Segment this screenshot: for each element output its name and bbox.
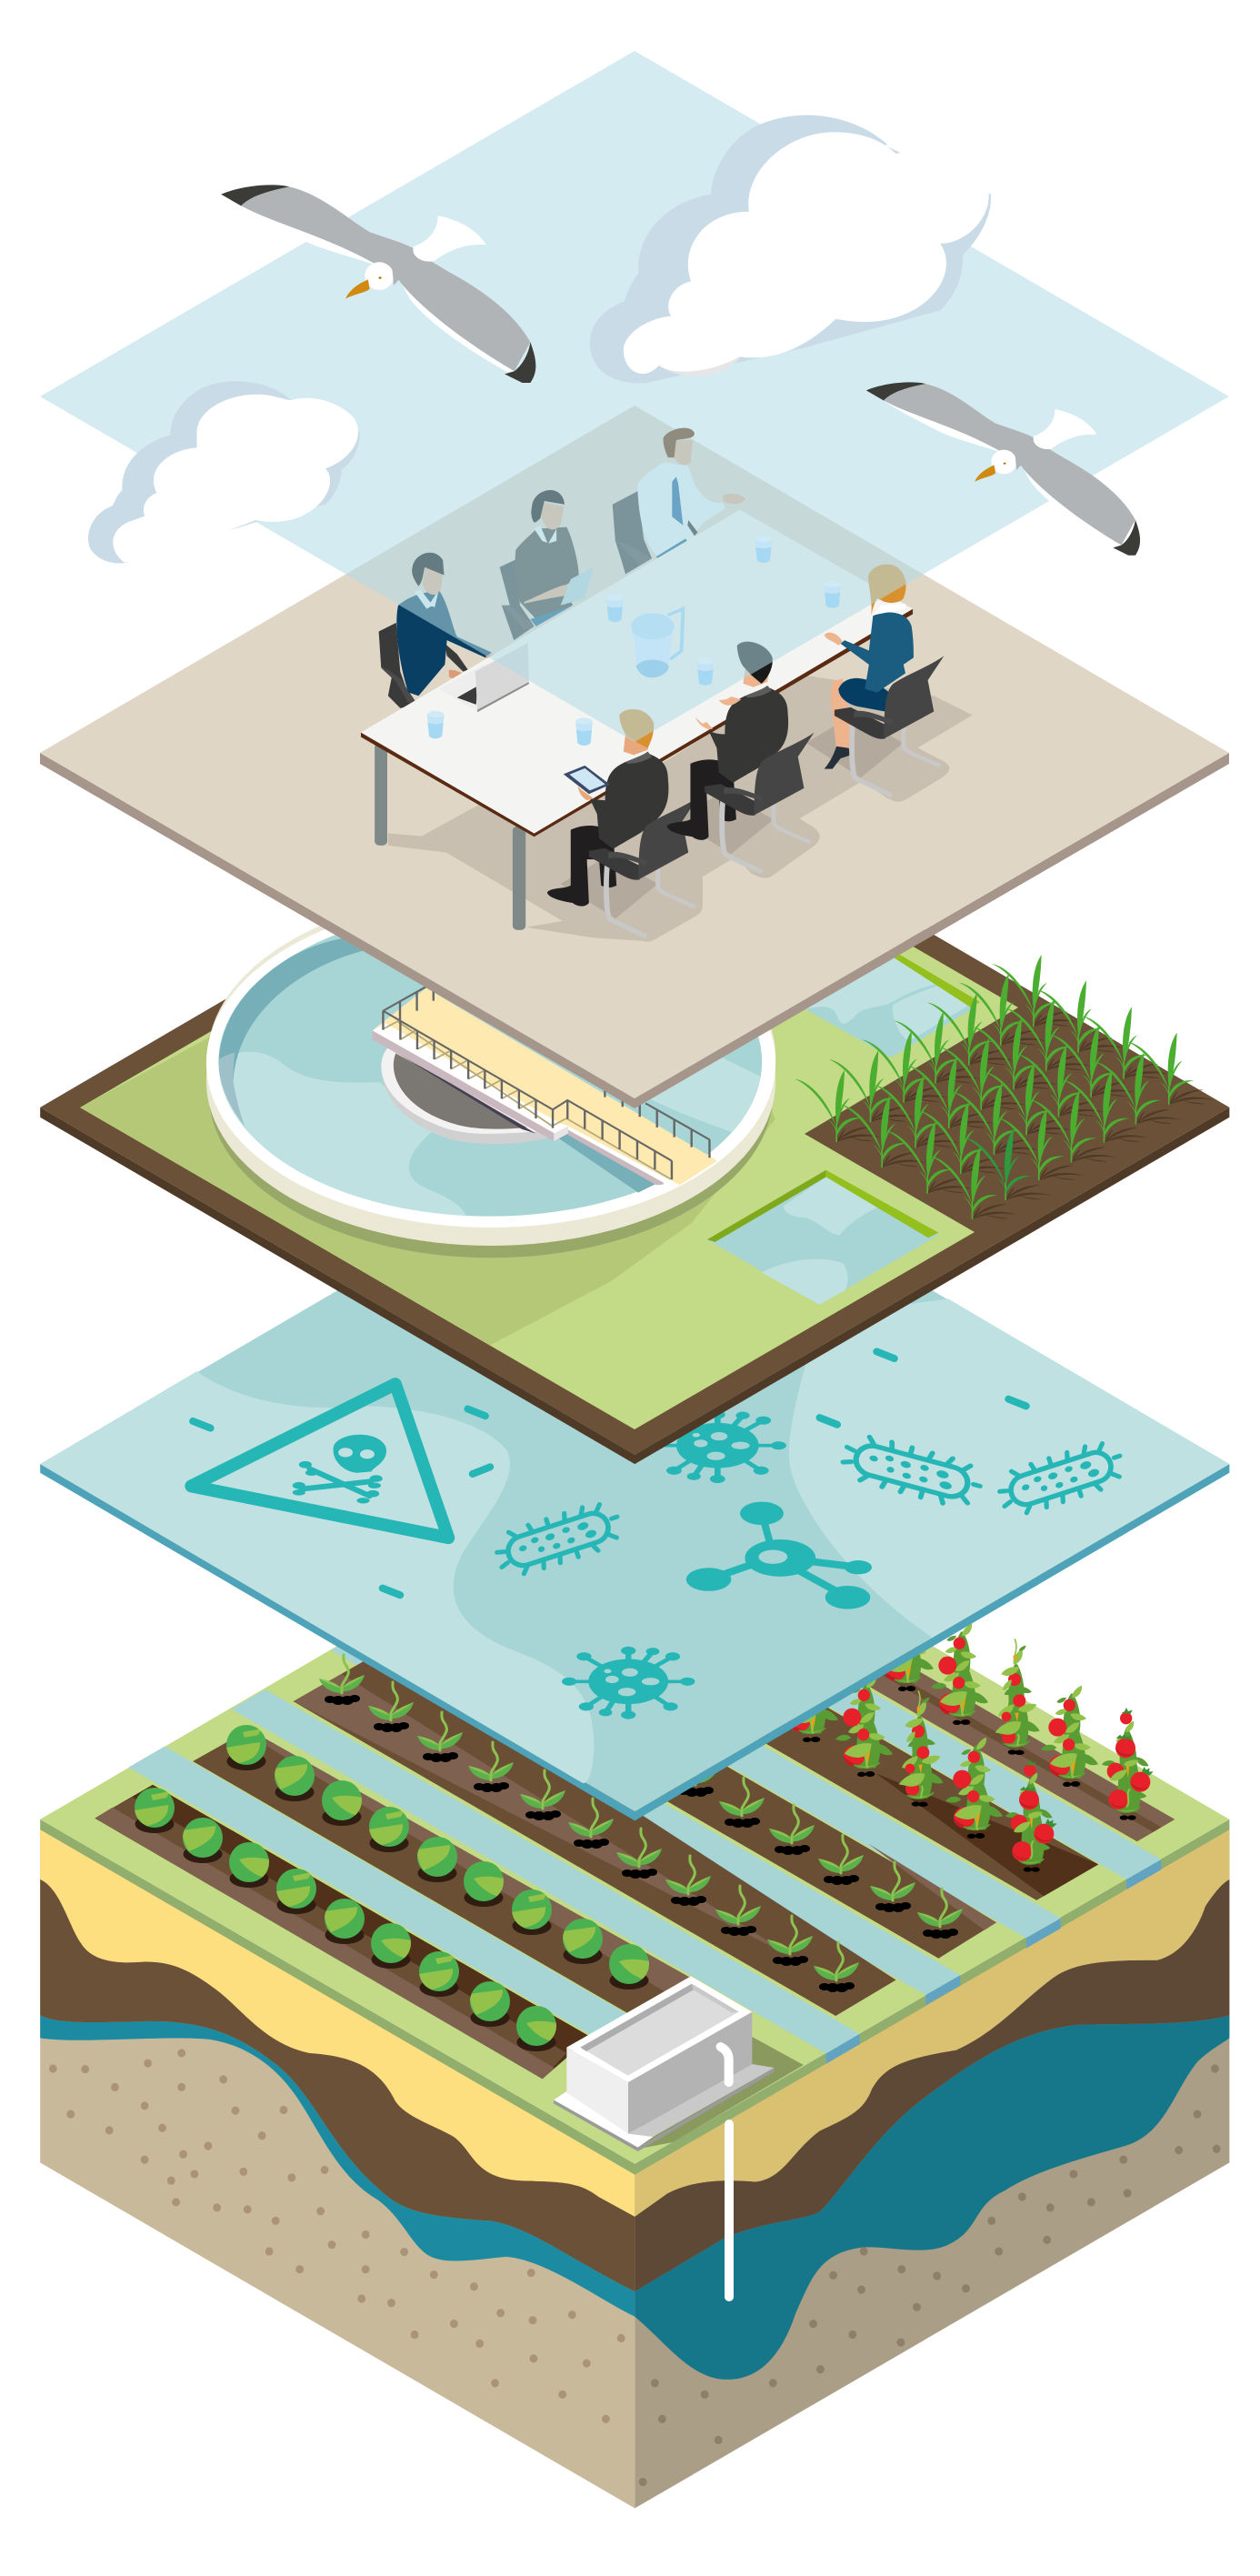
person: front middle, dark-haired man bbox=[667, 642, 815, 872]
icon: virus bottom bbox=[562, 1647, 695, 1719]
soil cross-section bbox=[40, 1819, 1229, 2509]
cloud: large bbox=[590, 115, 991, 383]
green ground surface bbox=[80, 785, 1018, 1429]
crop field: corn bbox=[795, 955, 1215, 1219]
clouds bbox=[88, 115, 991, 563]
corn shadows bbox=[836, 1012, 1215, 1219]
icon: virus right bbox=[649, 1410, 786, 1483]
tomato plants bbox=[781, 1590, 1154, 1872]
water jug bbox=[631, 609, 683, 677]
settling pond upper bbox=[709, 955, 980, 1057]
icon: bacterium centre right bbox=[839, 1431, 985, 1511]
laptop bbox=[439, 643, 529, 712]
icon: hazard triangle with skull bbox=[191, 1384, 448, 1538]
pills: scattered contaminants bbox=[193, 1351, 1026, 1595]
conference table bbox=[361, 510, 913, 930]
seedling rows bbox=[319, 1655, 963, 1992]
layer: contaminated water with hazard icons bbox=[40, 1117, 1229, 1820]
layer: water treatment plant bbox=[40, 922, 1229, 1464]
tank water bbox=[218, 931, 762, 1217]
cloud: small left bbox=[88, 381, 360, 563]
floor shadows bbox=[388, 675, 973, 942]
icon: bacterium far right bbox=[995, 1438, 1128, 1519]
person: back right, white shirt and tie bbox=[613, 428, 745, 574]
small settling pond lower bbox=[707, 1170, 938, 1305]
meeting scene bbox=[361, 428, 973, 942]
central basin bbox=[381, 1047, 552, 1144]
layer: meeting room floor bbox=[40, 406, 1229, 1108]
person: back middle, grey sweater bbox=[500, 490, 594, 640]
seagull: left bbox=[221, 185, 535, 383]
water sheet bbox=[40, 1117, 1229, 1820]
clarifier tank bbox=[206, 892, 775, 1258]
field surface with irrigation channels and crop rows bbox=[40, 1472, 1229, 2164]
lettuce rows bbox=[134, 1725, 650, 2051]
walkway bridge bbox=[373, 982, 717, 1193]
table glasses and water jug bbox=[427, 535, 841, 746]
floor slab bbox=[40, 406, 1229, 1108]
person: front right, woman in blue suit bbox=[825, 565, 944, 796]
person: front left, blond man with tablet bbox=[547, 709, 698, 937]
layer: translucent sky sheet bbox=[40, 51, 1229, 742]
pump house with well pipe bbox=[554, 1976, 804, 2301]
corn plants bbox=[795, 955, 1195, 1219]
icon: bacterium left bbox=[492, 1498, 625, 1580]
tank shadow on ground bbox=[80, 806, 775, 1345]
layer: soil block with crops bbox=[40, 1472, 1229, 2509]
icon: molecule bbox=[686, 1502, 872, 1609]
plant ground bbox=[40, 760, 1229, 1464]
seagull: right bbox=[866, 382, 1140, 556]
person: back left, navy sweater bbox=[379, 553, 502, 708]
